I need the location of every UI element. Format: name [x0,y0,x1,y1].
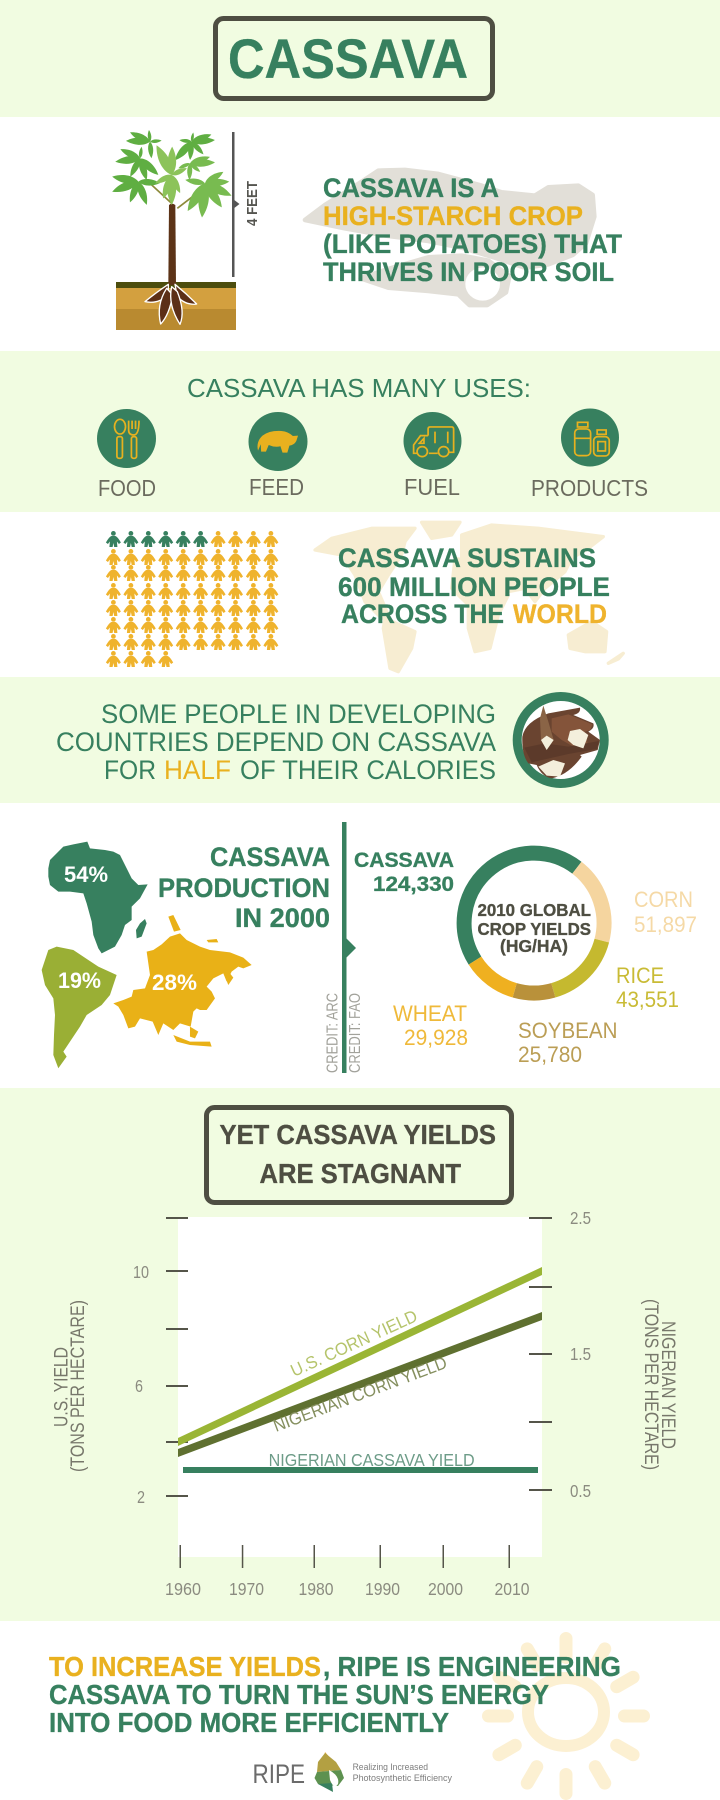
credits [324,993,364,1073]
labels: uses: PRODUCTS [531,475,648,501]
divider with arrow [342,822,356,1073]
right axis numbers: 0.5 [570,1481,591,1501]
label: wheat yield: 29,928 [404,1025,468,1050]
donut center label: 2010 GLOBAL [478,900,591,920]
left axis numbers: 6 [135,1376,143,1396]
line: U.S. corn yield [178,1267,542,1446]
line chart [133,1208,591,1599]
year labels: 1970 [229,1579,264,1599]
right axis ticks [529,1217,552,1491]
right axis numbers: 1.5 [570,1344,591,1364]
text: conclusion: CASSAVA TO TURN THE SUN’S ENERGY [49,1679,549,1710]
labels: uses [98,474,648,501]
text: high-starch crop: HIGH-STARCH CROP [323,201,583,231]
labels: uses: FUEL [404,474,460,500]
logo leaf [314,1752,344,1792]
left axis numbers: 2 [137,1487,145,1507]
donut center label: CROP YIELDS [478,919,591,939]
right axis numbers [570,1208,591,1501]
year labels: 1960 [165,1579,201,1599]
donut center label [478,900,591,956]
label: rice yield: RICE [616,963,664,988]
label: cassava yield [354,848,454,896]
right axis numbers: 2.5 [570,1208,591,1228]
illustration: cassava plant [111,129,236,330]
year labels: 1990 [365,1579,400,1599]
label: soybean yield: 25,780 [518,1042,582,1067]
heading: many uses: CASSAVA HAS MANY USES: [187,373,531,403]
plant foliage, trunk, roots [111,129,233,324]
map: South America 19% [42,947,117,1068]
donut chart: global crop yields [464,853,604,993]
heading: cassava production in 2000: PRODUCTION [158,873,330,903]
text: 600 million people [338,543,610,629]
text: conclusion: INTO FOOD MORE EFFICIENTLY [49,1707,449,1738]
right axis title [640,1299,678,1470]
year labels: 2000 [428,1579,463,1599]
label: corn yield: 51,897 [634,912,697,937]
text: conclusion [49,1651,621,1738]
label: soybean yield [518,1018,618,1067]
height marker [232,132,261,277]
logo tagline [353,1762,452,1784]
label: wheat yield: WHEAT [393,1001,467,1026]
icon: sun [488,1638,644,1794]
line: Nigerian cassava yield: NIGERIAN CASSAVA YIELD [269,1450,475,1470]
text: high-starch crop: THRIVES IN POOR SOIL [323,257,614,287]
text: conclusion: TO INCREASE YIELDS [49,1651,321,1682]
left axis ticks [166,1217,188,1497]
left axis title: (TONS PER HECTARE) [68,1300,89,1472]
text: 600 million people: ACROSS THE [341,599,504,629]
text: half of calories: FOR [104,755,156,785]
left axis title [52,1300,89,1472]
text: high-starch crop: (LIKE POTATOES) THAT [323,229,622,259]
panel: 600 million people [0,512,720,677]
logo: RIPE: RIPE [252,1759,305,1789]
title box [216,18,492,98]
panel: conclusion [0,1621,720,1800]
label: rice yield [616,963,679,1012]
panel: title band [0,0,720,117]
text: 600 million people: WORLD [513,599,607,629]
credits: CREDIT: ARC [324,993,342,1073]
icon: feed [248,412,308,471]
map: Asia 28%: 28% [152,970,197,995]
line: Nigerian cassava yield [183,1450,538,1473]
heading: cassava production in 2000 [158,842,330,933]
left axis numbers: 10 [133,1262,149,1282]
illustration: grey cassava roots [305,170,594,305]
credits: CREDIT: FAO [347,993,364,1073]
labels: uses: FOOD [98,475,156,501]
heading: cassava production in 2000: IN 2000 [235,903,330,933]
label: cassava yield: 124,330 [373,872,454,896]
text: high-starch crop: CASSAVA IS A [323,173,499,203]
line: Nigerian corn yield: NIGERIAN CORN YIELD [270,1352,450,1436]
text: half of calories: HALF [164,755,231,785]
text: half of calories [56,699,496,785]
year labels [165,1579,530,1599]
label: wheat yield [393,1001,468,1050]
world map [315,522,623,672]
label: corn yield [634,887,697,937]
line: U.S. corn yield: U.S. CORN YIELD [287,1306,420,1381]
heading box: yet cassava yields are stagnant: YET CASSAVA YIELDS [220,1119,496,1150]
right axis title: NIGERIAN YIELD [657,1321,678,1449]
map: Africa 54%: 54% [64,862,108,887]
left axis numbers [133,1262,149,1507]
panel: yields chart [0,1088,720,1621]
map: Asia 28% [113,915,252,1047]
labels: uses: FEED [249,474,304,500]
map: Africa 54% [48,842,148,953]
label: cassava yield: CASSAVA [354,848,454,872]
year labels: 2010 [494,1579,530,1599]
left axis title: U.S. YIELD [52,1347,72,1427]
heading box: yet cassava yields are stagnant [206,1108,512,1202]
icon: products [561,408,619,466]
logo tagline: Realizing Increased [353,1762,428,1773]
line: Nigerian corn yield [178,1312,542,1457]
donut center label: (HG/HA) [500,936,568,956]
icon: fuel [404,412,462,470]
right axis title: (TONS PER HECTARE) [640,1299,661,1470]
panel: cassava production and crop yields [0,803,720,1088]
text: high-starch crop [323,173,622,287]
pictogram: people grid [106,531,278,667]
panel: many uses [0,351,720,512]
text: half of calories: SOME PEOPLE IN DEVELOPING [101,699,496,729]
height marker: 4 FEET [244,181,261,226]
logo tagline: Photosynthetic Efficiency [353,1773,452,1784]
heading: cassava production in 2000: CASSAVA [210,842,330,872]
image: cassava roots in ring [517,696,604,784]
heading box: yet cassava yields are stagnant: ARE STAGNANT [260,1158,461,1189]
map: South America 19%: 19% [58,968,101,993]
text: 600 million people: CASSAVA SUSTAINS [338,543,596,573]
logo: RIPE [252,1752,452,1792]
text: 600 million people: 600 MILLION PEOPLE [338,572,610,602]
title: CASSAVA [228,27,468,90]
panel: half of calories [0,677,720,803]
label: soybean yield: SOYBEAN [518,1018,618,1043]
label: corn yield: CORN [634,887,693,912]
text: half of calories: COUNTRIES DEPEND ON CASSAVA [56,727,496,757]
icon: food [97,409,156,468]
bottom axis ticks [180,1545,510,1568]
text: conclusion: , RIPE IS ENGINEERING [323,1651,621,1682]
text: half of calories: OF THEIR CALORIES [240,755,496,785]
panel: high-starch crop [0,117,720,351]
soil layers [116,282,236,330]
label: rice yield: 43,551 [616,987,679,1012]
year labels: 1980 [298,1579,334,1599]
